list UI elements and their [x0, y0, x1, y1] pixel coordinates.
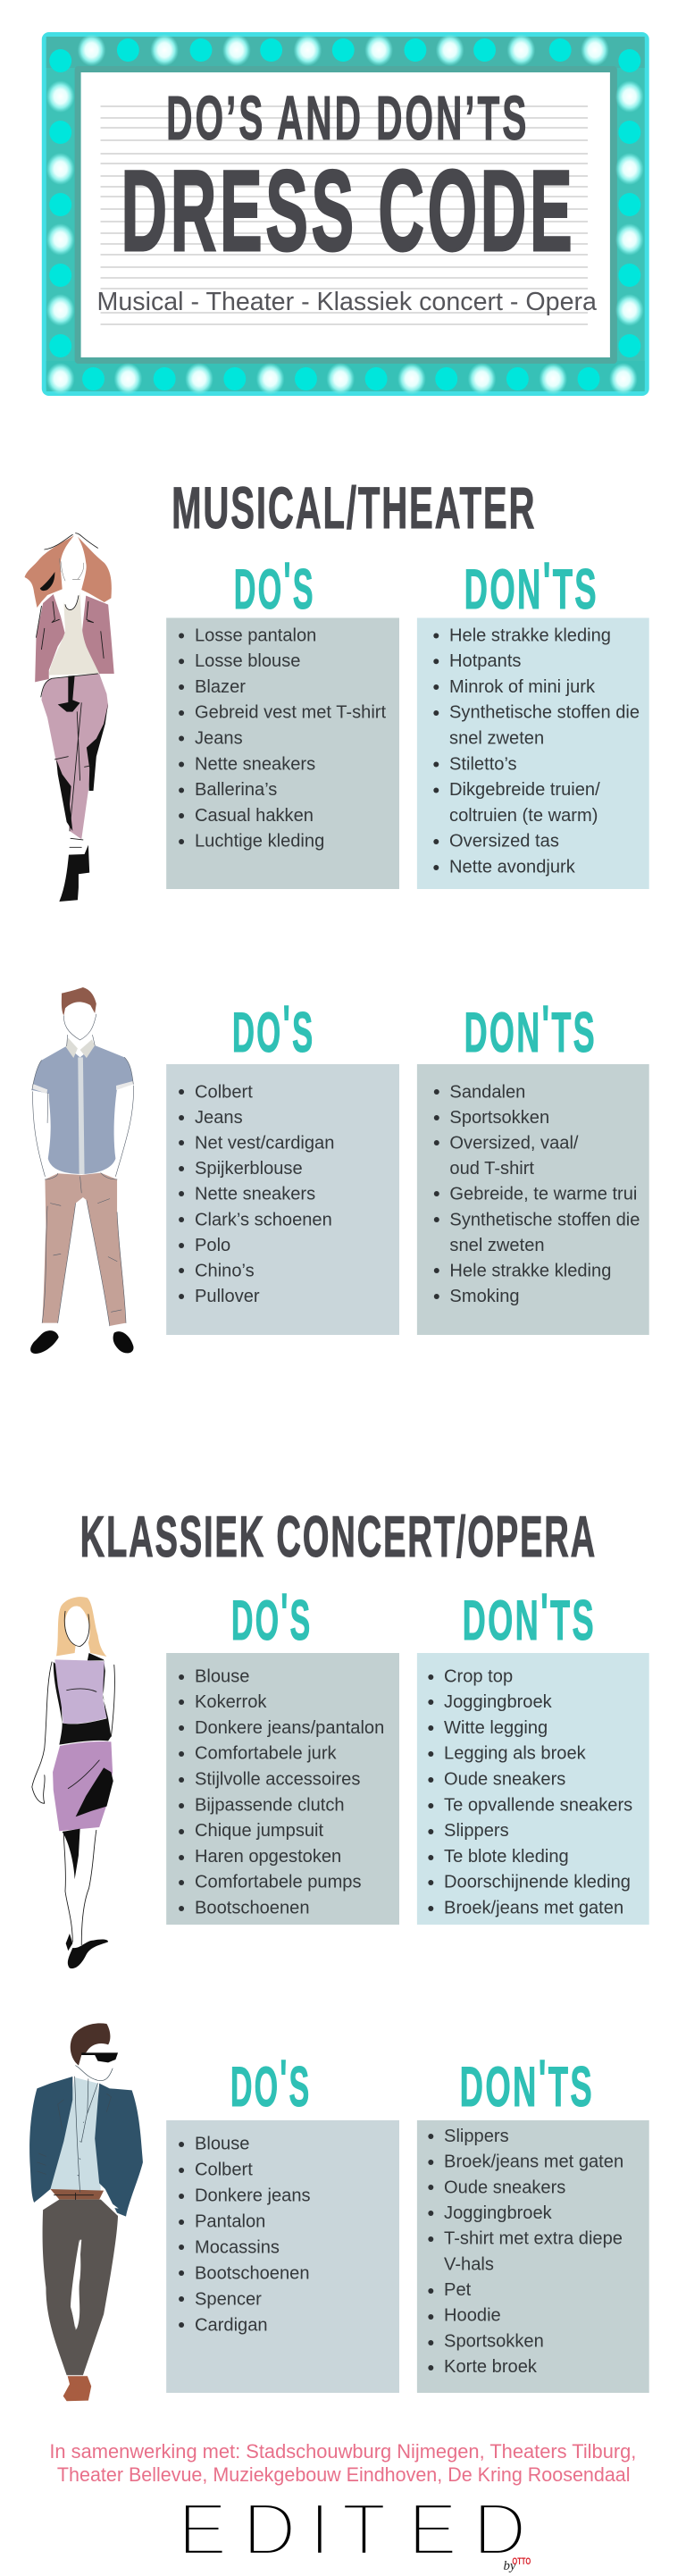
panel: musical women don'ts: Oversized tas: [449, 832, 559, 852]
panel: musical men don'ts: Synthetische stoffen die: [449, 1210, 640, 1229]
panel: musical women do's: Luchtige kleding: [195, 832, 324, 852]
panel: musical men don'ts: Sandalen: [449, 1082, 525, 1102]
panel: klassiek women do's: Kokerrok: [195, 1692, 267, 1712]
panel: musical men do's: Chino’s: [195, 1261, 255, 1281]
logo: edited by otto: by: [503, 2559, 516, 2573]
panel: klassiek men don'ts: [417, 2120, 649, 2393]
panel: klassiek men don'ts: T-shirt met extra diepe: [444, 2229, 623, 2249]
panel: klassiek men do's: Pantalon: [195, 2211, 265, 2231]
panel: klassiek men do's: Blouse: [195, 2134, 249, 2153]
panel: musical men do's: Net vest/cardigan: [195, 1133, 334, 1154]
heading: don'ts 3: ': [540, 1582, 550, 1645]
panel: musical women do's: Jeans: [195, 728, 243, 749]
panel: klassiek women don'ts: Te blote kleding: [444, 1847, 569, 1867]
panel: klassiek women don'ts: Witte legging: [444, 1718, 548, 1738]
heading: don'ts 2: TS: [551, 1002, 597, 1064]
heading: do's 4: ': [280, 2049, 289, 2111]
credits text: In samenwerking met: Stadschouwburg Nijmegen, Theaters Tilburg,: [49, 2440, 636, 2463]
logo: edited by otto: OTTO: [512, 2556, 531, 2567]
panel: klassiek men do's: Colbert: [195, 2160, 253, 2179]
logo: edited by otto: T: [341, 2488, 387, 2571]
panel: klassiek men do's: Mocassins: [195, 2237, 280, 2257]
panel: musical men do's: Nette sneakers: [195, 1185, 315, 1204]
panel: musical women don'ts: Stiletto’s: [449, 754, 517, 774]
heading: do's 1: DO: [234, 558, 325, 621]
panel: musical women don'ts: snel zweten: [449, 728, 544, 749]
panel: klassiek men do's: Cardigan: [195, 2315, 268, 2335]
light bulbs: [46, 34, 644, 395]
panel: musical women don'ts: Hele strakke kleding: [449, 625, 611, 645]
panel: musical men don'ts: Gebreide, te warme trui: [449, 1185, 637, 1204]
logo: edited by otto: D: [473, 2488, 526, 2571]
heading: do's 4: S: [289, 2056, 311, 2119]
panel: musical women don'ts: coltruien (te warm): [449, 806, 598, 826]
panel: klassiek men don'ts: Oude sneakers: [444, 2177, 565, 2197]
heading: do's 3: ': [280, 1582, 290, 1645]
panel: musical men do's: Jeans: [195, 1108, 243, 1128]
panel: klassiek women don'ts: Legging als broek: [444, 1744, 587, 1764]
heading: don'ts 1: DON: [464, 558, 599, 621]
panel: musical women do's: Ballerina’s: [195, 780, 277, 800]
panel: klassiek men don'ts: Joggingbroek: [444, 2203, 553, 2223]
logo: edited by otto: E: [178, 2488, 227, 2571]
panel: klassiek women don'ts: Slippers: [444, 1821, 509, 1841]
panel: klassiek women don'ts: Doorschijnende kleding: [444, 1873, 631, 1892]
panel: klassiek men don'ts: V-hals: [444, 2254, 494, 2274]
panel: musical men don'ts: oud T-shirt: [449, 1159, 534, 1179]
panel: musical women do's: Losse pantalon: [195, 625, 316, 645]
panel: musical women don'ts: Nette avondjurk: [449, 857, 576, 877]
heading: do's 1: ': [283, 551, 293, 614]
panel: klassiek men do's: Spencer: [195, 2289, 262, 2309]
sign frame: [42, 32, 649, 396]
panel: klassiek women do's: Chique jumpsuit: [195, 1821, 324, 1841]
panel: musical men don'ts: snel zweten: [449, 1236, 545, 1255]
heading: don'ts 3: TS: [550, 1590, 596, 1652]
panel: klassiek women do's: Haren opgestoken: [195, 1847, 341, 1867]
panel: musical men don'ts: Sportsokken: [449, 1108, 549, 1128]
illustration: man in blue shirt: [30, 987, 133, 1354]
illustration: man in navy blazer: [29, 2023, 143, 2401]
heading: do's 3: DO: [231, 1590, 322, 1652]
panel: klassiek men don'ts: Korte broek: [444, 2357, 538, 2377]
panel: klassiek men do's: Bootschoenen: [195, 2263, 310, 2283]
panel: musical men do's: Spijkerblouse: [195, 1159, 303, 1179]
panel: klassiek men don'ts: Pet: [444, 2280, 472, 2300]
panel: musical women do's: Casual hakken: [195, 806, 314, 826]
panel: klassiek men don'ts: Sportsokken: [444, 2331, 544, 2351]
heading: don'ts 2: ': [542, 994, 551, 1057]
panel: musical women don'ts: Synthetische stoffen die: [449, 703, 640, 723]
panel: klassiek women do's: Stijlvolle accessoires: [195, 1769, 360, 1790]
credits text: Theater Bellevue, Muziekgebouw Eindhoven, De Kring Roosendaal: [57, 2463, 631, 2486]
panel: musical women do's: [166, 618, 399, 889]
subtitle: Musical - Theater - Klassiek concert - Opera: [97, 288, 598, 316]
heading: don'ts 4: ': [539, 2049, 548, 2111]
panel: musical women do's: Nette sneakers: [195, 754, 315, 774]
panel: musical men do's: [166, 1064, 399, 1335]
panel: klassiek women do's: Comfortabele jurk: [195, 1744, 338, 1764]
heading: don'ts 4: TS: [548, 2056, 594, 2119]
heading: don'ts 1: ': [543, 551, 553, 614]
panel: klassiek women do's: Comfortabele pumps: [195, 1873, 362, 1892]
logo: edited by otto: [178, 2488, 531, 2573]
panel: musical women do's: Gebreid vest met T-shirt: [195, 703, 386, 723]
heading: don'ts 3: DON: [463, 1590, 598, 1652]
panel: musical men do's: Clark’s schoenen: [195, 1210, 332, 1229]
illustration: woman in purple dress: [32, 1597, 114, 1968]
panel: musical men do's: Colbert: [195, 1082, 253, 1102]
panel: klassiek men don'ts: Hoodie: [444, 2306, 501, 2326]
panel: klassiek men do's: [166, 2120, 399, 2393]
panel: musical women don'ts: Hotpants: [449, 651, 521, 671]
panel: musical men don'ts: [417, 1064, 649, 1335]
panel: musical women do's: Losse blouse: [195, 651, 300, 671]
panel: musical men do's: Polo: [195, 1236, 230, 1255]
panel: klassiek men don'ts: Broek/jeans met gaten: [444, 2152, 623, 2172]
heading: don'ts 1: TS: [553, 558, 598, 621]
heading: do's 1: S: [293, 558, 315, 621]
panel: klassiek women do's: Donkere jeans/pantalon: [195, 1718, 384, 1738]
logo: edited by otto: E: [408, 2488, 457, 2571]
illustration: woman in pink jacket: [25, 533, 114, 902]
panel: musical women don'ts: Minrok of mini jurk: [449, 677, 596, 697]
panel: musical men don'ts: Oversized, vaal/: [449, 1133, 579, 1154]
credits text: [49, 2440, 636, 2486]
heading: don'ts 4: DON: [460, 2056, 595, 2119]
panel: klassiek women don'ts: Te opvallende sneakers: [444, 1795, 632, 1815]
heading: do's 2: S: [292, 1002, 314, 1064]
panel: musical men do's: Pullover: [195, 1287, 260, 1306]
panel: klassiek women don'ts: Broek/jeans met gaten: [444, 1898, 623, 1918]
heading: do's 2: DO: [232, 1002, 323, 1064]
heading: do's 2: ': [282, 994, 292, 1057]
panel: klassiek men do's: Donkere jeans: [195, 2186, 311, 2205]
panel: klassiek men don'ts: Slippers: [444, 2127, 509, 2146]
panel: klassiek women don'ts: Crop top: [444, 1666, 513, 1686]
heading: do's 3: S: [290, 1590, 312, 1652]
marquee title sign: [42, 32, 649, 396]
panel: klassiek women don'ts: Oude sneakers: [444, 1769, 565, 1790]
heading: do's 4: DO: [230, 2056, 322, 2119]
heading: don'ts 2: DON: [464, 1002, 599, 1064]
panel: klassiek women don'ts: Joggingbroek: [444, 1692, 553, 1712]
panel: klassiek women do's: Bijpassende clutch: [195, 1795, 345, 1815]
panel: klassiek women do's: Bootschoenen: [195, 1898, 310, 1918]
panel: musical women don'ts: [417, 618, 649, 889]
panel: klassiek women do's: [166, 1653, 399, 1925]
panel: musical women don'ts: Dikgebreide truien/: [449, 780, 600, 800]
panel: musical men don'ts: Smoking: [449, 1287, 520, 1306]
panel: klassiek women do's: Blouse: [195, 1666, 249, 1686]
panel: musical men don'ts: Hele strakke kleding: [449, 1261, 611, 1281]
logo: edited by otto: D: [243, 2488, 296, 2571]
panel: musical women do's: Blazer: [195, 677, 246, 697]
logo: edited by otto: I: [309, 2488, 330, 2571]
panel: klassiek women don'ts: [417, 1653, 649, 1925]
